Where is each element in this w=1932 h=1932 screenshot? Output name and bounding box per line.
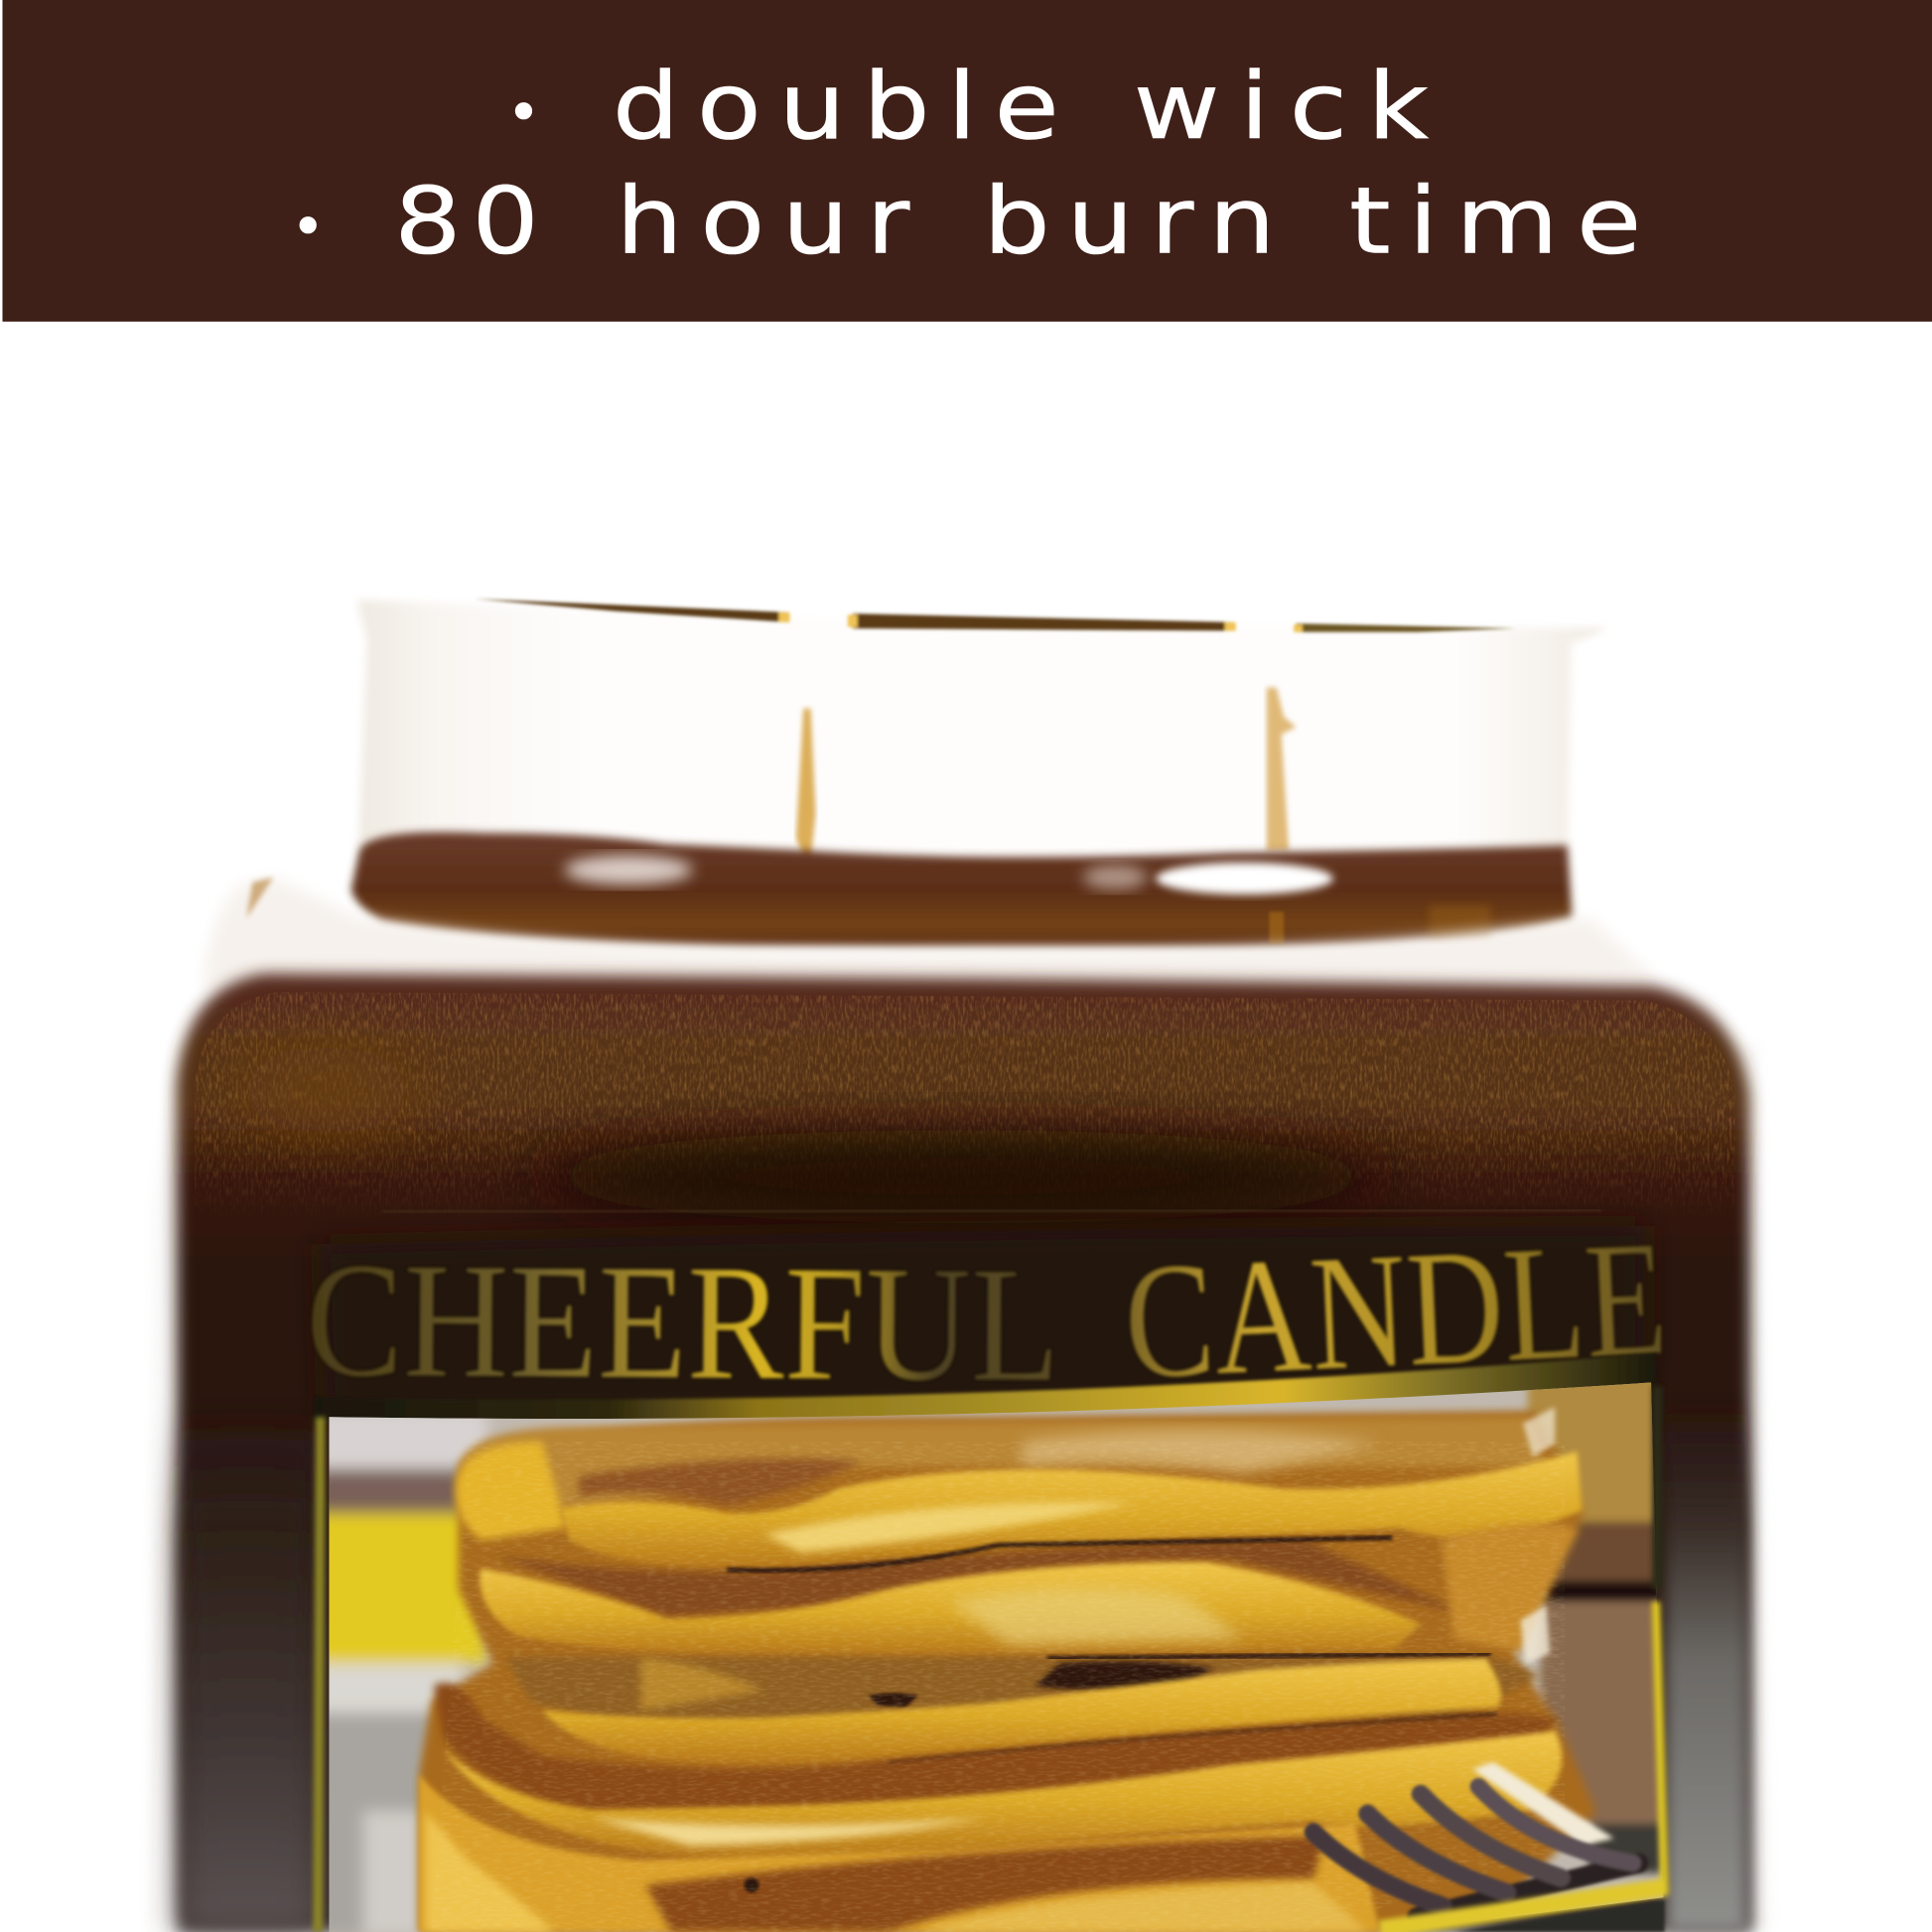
warm patch: [240, 1047, 413, 1134]
wick: right: [1267, 688, 1297, 850]
pancake layer 4: [434, 1683, 1562, 1861]
label photo: [314, 1368, 1670, 1932]
feature line: double wick: double: [613, 52, 1059, 160]
jar shoulder: [204, 878, 1657, 986]
feature line: 80 hour burn time: [291, 167, 1641, 275]
candle jar photo: [153, 599, 1767, 1932]
feature line: 80 hour burn time: time: [1349, 167, 1641, 275]
photo background: left: [314, 1411, 486, 1932]
label gold frame: [318, 1386, 1665, 1932]
jar body: [176, 973, 1752, 1932]
photo background: right: [1528, 1368, 1670, 1872]
wax in neck: [351, 832, 1573, 947]
feature line: double wick: wick: [1134, 52, 1429, 160]
syrup highlights: [1472, 1407, 1614, 1846]
feature line: double wick: •: [507, 80, 540, 146]
wax speckle: [195, 992, 1734, 1220]
feature line: 80 hour burn time: burn: [983, 167, 1276, 275]
gold strip: [314, 1353, 1657, 1427]
brand name: CANDLE: [1121, 1206, 1671, 1413]
pancake layer 2: [480, 1524, 1580, 1656]
glass neck: [357, 599, 1608, 878]
fork: [1313, 1787, 1639, 1917]
pancake layer 5: [419, 1774, 1380, 1932]
wick: left: [796, 709, 816, 873]
pancake layer 3: [505, 1654, 1540, 1765]
brand name: CHEERFUL: [306, 1228, 1060, 1416]
body shading: [530, 1130, 1392, 1223]
brand name: [312, 1245, 1662, 1382]
label band: [306, 1206, 1671, 1427]
jar halo: [153, 1047, 1767, 1932]
feature line: 80 hour burn time: 80: [394, 167, 539, 275]
feature line: double wick: [507, 52, 1429, 160]
feature line: 80 hour burn time: hour: [617, 167, 910, 275]
gold rim: [475, 599, 1516, 632]
feature line: 80 hour burn time: •: [291, 195, 325, 260]
pancake layer 1: [455, 1417, 1583, 1571]
stack texture: [431, 1442, 1565, 1932]
lower right corner shadow: [1453, 1900, 1665, 1932]
header banner: [2, 0, 1932, 322]
pancake stack base: [419, 1411, 1595, 1932]
